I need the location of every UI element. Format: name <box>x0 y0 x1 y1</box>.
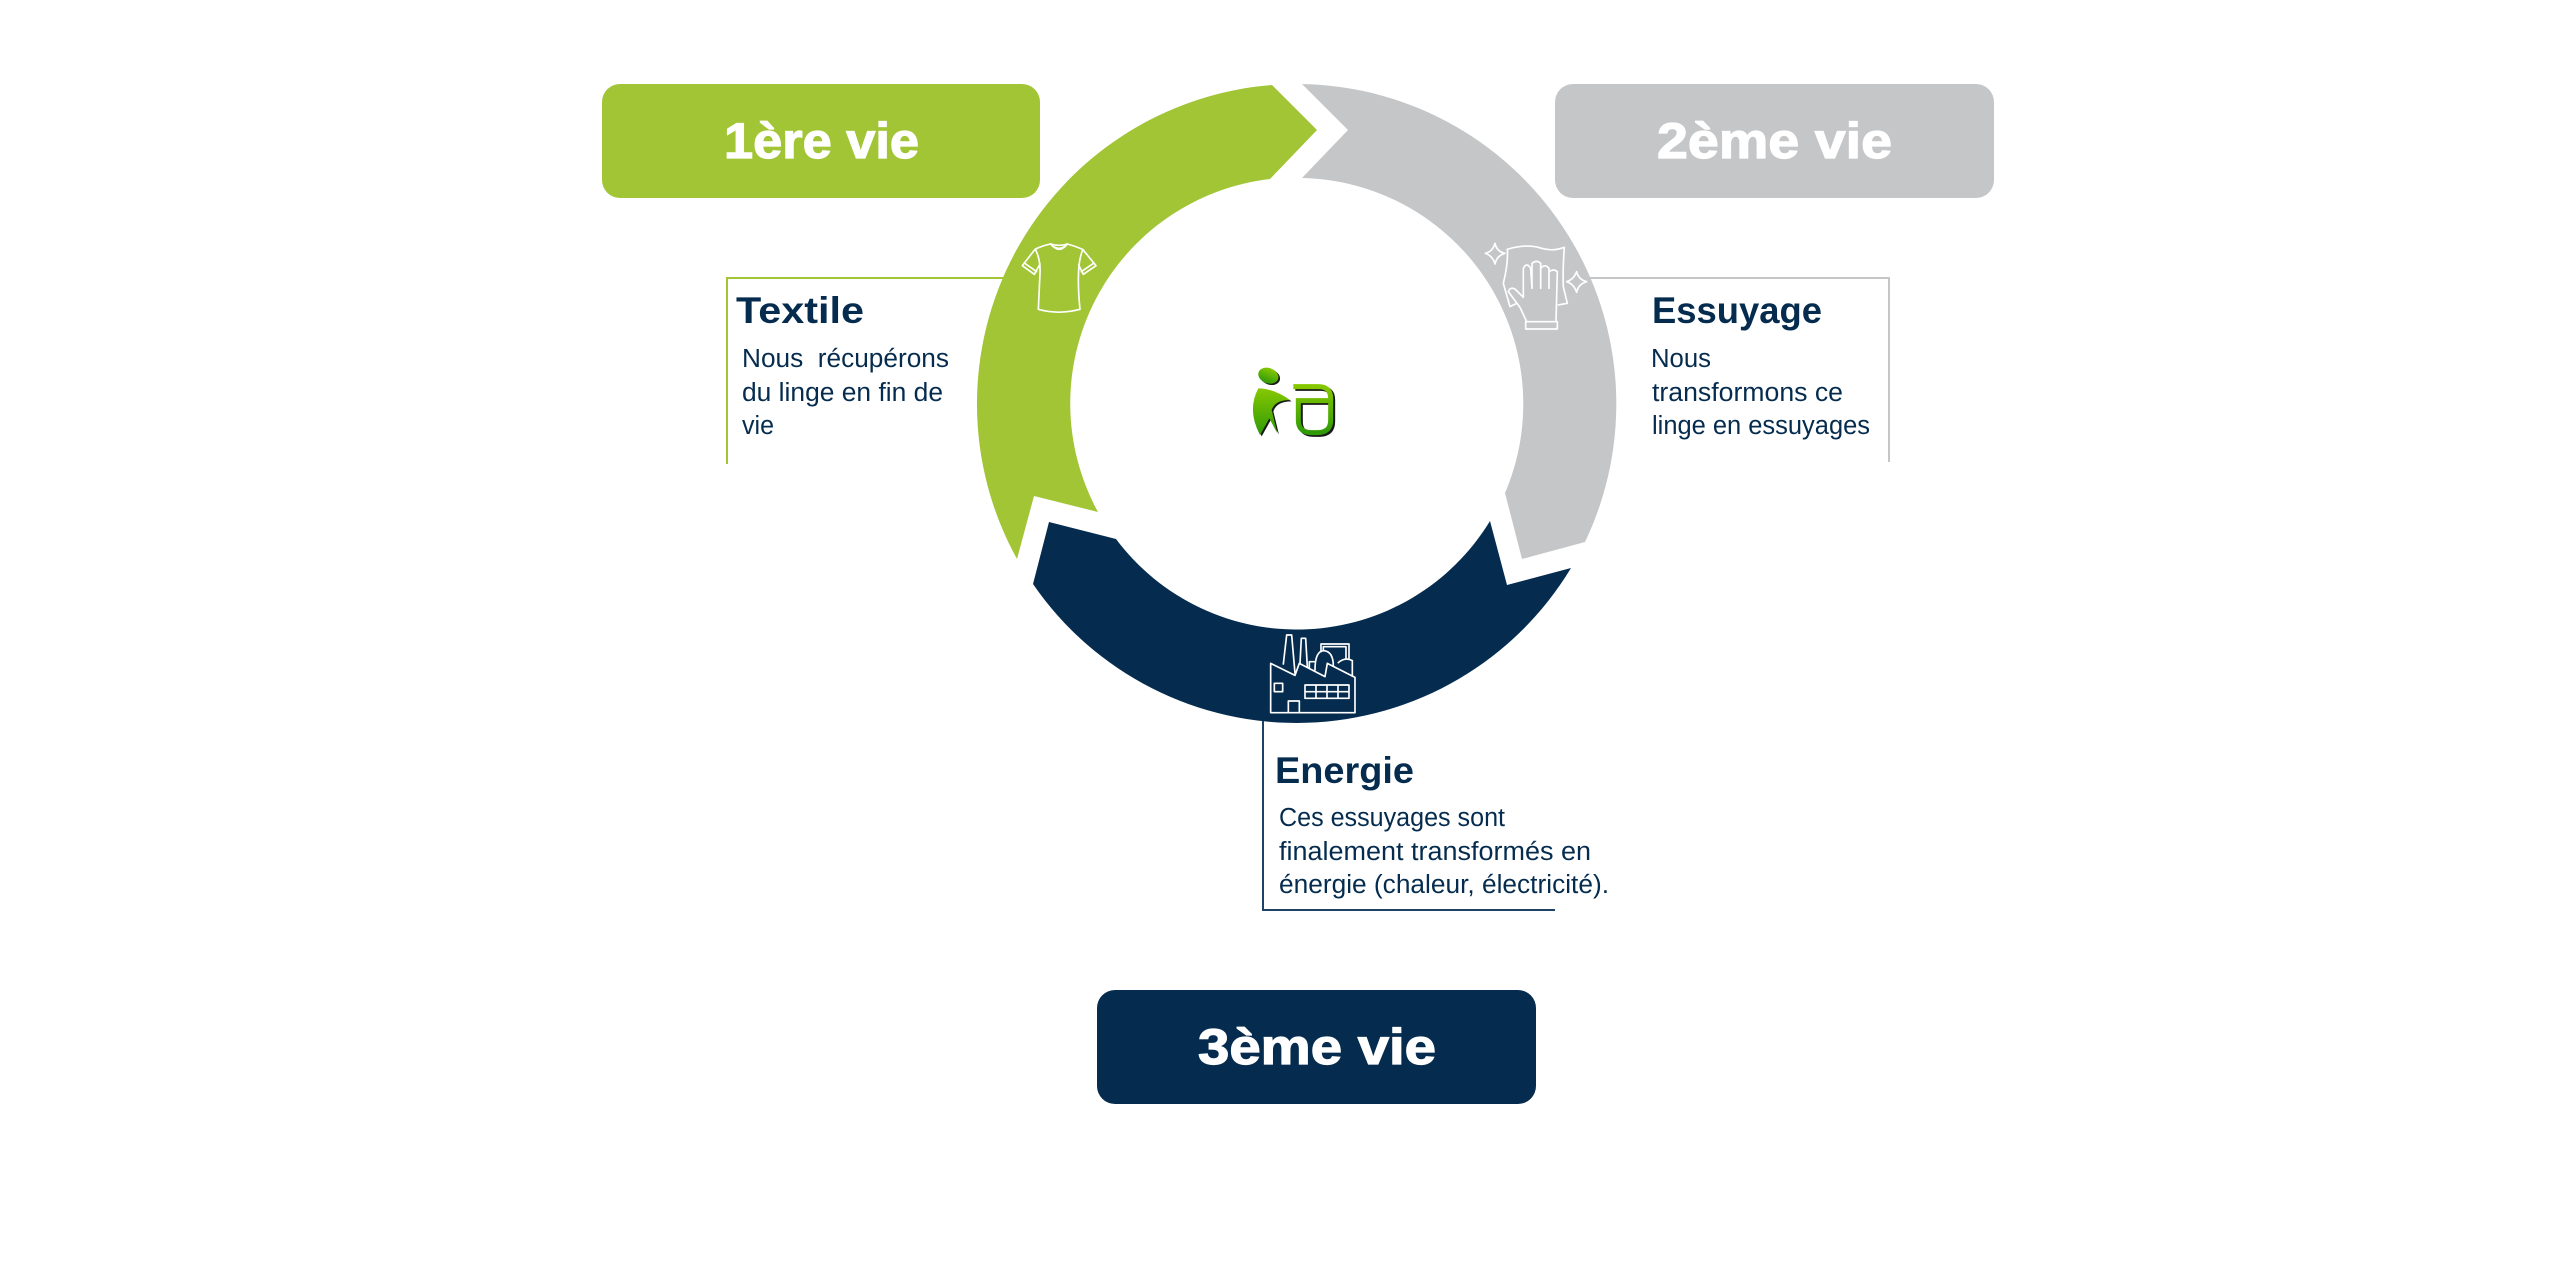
logo: bin shadow <box>1295 388 1333 434</box>
panel: Energie: énergie (chaleur, électricité). <box>1279 871 1609 899</box>
panel: Textile: Textile <box>736 290 864 331</box>
panel: Textile <box>727 278 1010 464</box>
panel: Energie: Ces essuyages sont <box>1279 804 1505 832</box>
panel: Essuyage <box>1585 278 1889 462</box>
arrow: grey segment <box>1302 84 1616 559</box>
badge: 2ème vie <box>1555 84 1994 198</box>
badge: 3ème vie: 3ème vie <box>1198 1019 1436 1075</box>
panel: Essuyage: Nous <box>1651 345 1711 373</box>
logo: bin <box>1293 387 1331 433</box>
arrow: navy segment <box>1033 521 1571 723</box>
panel: Energie <box>1263 715 1609 910</box>
panel: Essuyage: transformons ce <box>1652 379 1843 407</box>
icon: hand wiping with cloth <box>1485 243 1587 329</box>
arrow: green segment <box>977 85 1317 559</box>
icon: factory <box>1271 635 1355 713</box>
badge: 2ème vie: 2ème vie <box>1657 113 1892 169</box>
panel: Energie: Energie <box>1275 750 1414 791</box>
logo: figure shadow <box>1255 366 1292 436</box>
badge: 1ère vie <box>602 84 1040 198</box>
logo: figure <box>1253 365 1290 435</box>
panel: Essuyage: linge en essuyages <box>1652 412 1870 440</box>
icon: t-shirt <box>1022 244 1096 312</box>
panel: Textile: du linge en fin de <box>742 379 943 407</box>
panel: Essuyage: Essuyage <box>1652 290 1822 331</box>
panel: Textile: vie <box>742 412 774 440</box>
logo <box>1253 365 1333 436</box>
badge: 1ère vie: 1ère vie <box>724 113 919 169</box>
panel: Energie: finalement transformés en <box>1279 838 1591 866</box>
panel: Textile: Nous récupérons <box>742 345 949 373</box>
badge: 3ème vie <box>1097 990 1536 1104</box>
